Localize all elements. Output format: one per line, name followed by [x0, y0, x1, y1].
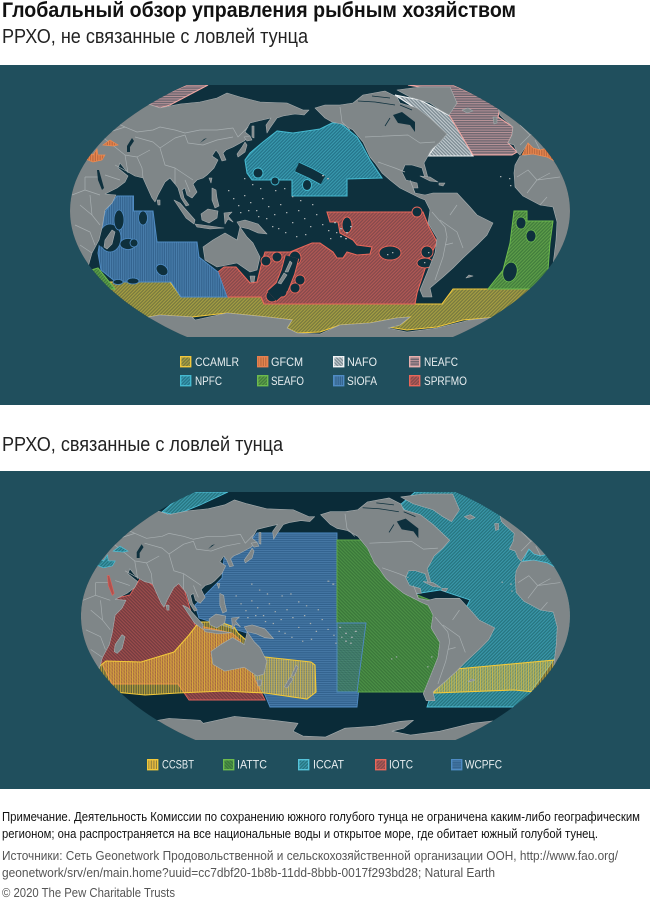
- legend: tuna RFMOs: WCPFC: [465, 758, 502, 772]
- zone: NPFC: [245, 123, 382, 196]
- inland seas in ICCAT and IOTC: [94, 546, 558, 595]
- legend: non-tuna RFMOs: NPFC: [195, 374, 222, 388]
- legend: non-tuna RFMOs: NEAFC: [424, 355, 458, 369]
- zone: ICCAT: [162, 488, 600, 707]
- legend: tuna RFMOs: ICCAT: [313, 758, 345, 772]
- zone: SPRFMO: [218, 207, 437, 304]
- zone: SIOFA: [98, 196, 227, 297]
- sources text: Источники: Сеть Geonetwork Продовольственной и сельскохозяйственной организации ООН, http://www.fao.org/: [2, 849, 618, 863]
- zone: IATTC: [337, 540, 447, 692]
- heading: tuna RFMOs: РРХО, связанные с ловлей тунца: [2, 434, 284, 456]
- zone: IOTC: [100, 577, 265, 700]
- zone: SEAFO: [88, 211, 553, 289]
- sources text: geonetwork/srv/en/main.home?uuid=cc7dbf20-1b8b-11dd-8bbb-0017f293bd28; Natural Earth: [2, 866, 495, 880]
- sources text: [2, 849, 618, 880]
- zone: WCPFC and IATTC overlap: [337, 623, 366, 692]
- legend: tuna RFMOs: [148, 758, 502, 772]
- legend: non-tuna RFMOs: SIOFA: [347, 374, 377, 388]
- panel: non-tuna RFMO map: [0, 65, 650, 405]
- zone: GFCM: [83, 140, 558, 190]
- note text: регионом; она распространяется на все национальные воды и открытое море, где обитает южный голубой тунец.: [2, 827, 598, 841]
- legend: tuna RFMOs: IOTC: [389, 758, 413, 772]
- legend: tuna RFMOs: CCSBT: [162, 758, 195, 772]
- zone: CCSBT: [95, 622, 555, 699]
- legend: non-tuna RFMOs: SPRFMO: [424, 374, 467, 388]
- world map: non-tuna RFMO areas: [70, 85, 570, 337]
- note text: [2, 810, 640, 841]
- world map: tuna RFMO areas: [81, 492, 570, 740]
- zone: NAFO: [395, 95, 473, 156]
- zone: WCPFC: [195, 533, 366, 707]
- panel: tuna RFMO map: [0, 471, 650, 789]
- legend: non-tuna RFMOs: CCAMLR: [195, 355, 239, 369]
- zone: NEAFC: [145, 85, 517, 155]
- land masses: [40, 87, 600, 345]
- legend: non-tuna RFMOs: [181, 355, 467, 388]
- zone: CCAMLR: [103, 282, 535, 333]
- land masses: [52, 494, 599, 748]
- legend: non-tuna RFMOs: NAFO: [347, 355, 377, 369]
- legend: non-tuna RFMOs: SEAFO: [271, 374, 304, 388]
- legend: non-tuna RFMOs: GFCM: [271, 355, 303, 369]
- heading: non-tuna RFMOs: РРХО, не связанные с ловлей тунца: [2, 26, 309, 48]
- legend: tuna RFMOs: IATTC: [237, 758, 267, 772]
